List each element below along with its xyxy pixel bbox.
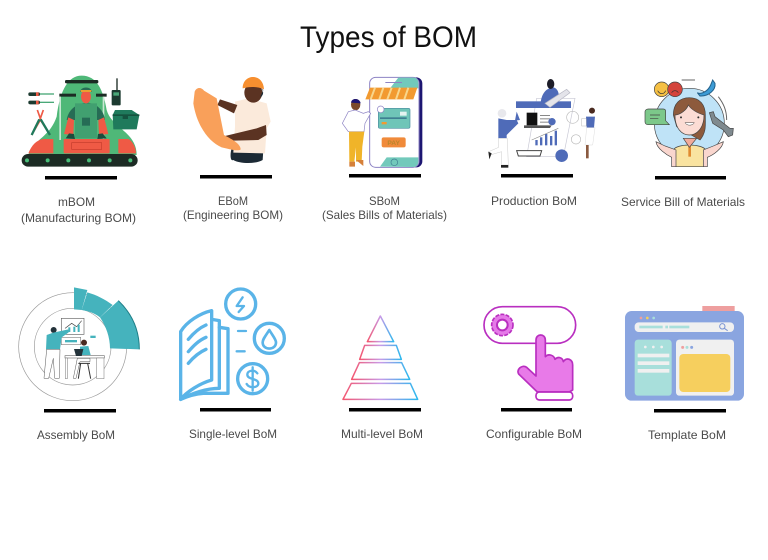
divider bar xyxy=(654,409,726,412)
label subtitle: (Engineering BOM) xyxy=(183,208,283,222)
icon: segmented ring with team xyxy=(19,287,139,401)
icon: engineer with blueprint xyxy=(193,77,271,163)
panel: Service Bill of Materials xyxy=(621,80,745,209)
icon: phone shop: PAY xyxy=(387,140,401,147)
label: Assembly BoM xyxy=(37,428,115,442)
icon: toggle with gear and hand xyxy=(484,307,576,400)
label subtitle: (Manufacturing BOM) xyxy=(21,211,136,225)
divider bar xyxy=(200,175,272,178)
divider bar xyxy=(200,408,271,412)
panel: Single-level BoM xyxy=(181,289,284,441)
icon: book and coins xyxy=(181,289,284,399)
divider bar xyxy=(45,176,117,180)
divider bar xyxy=(655,176,726,180)
label: Single-level BoM xyxy=(189,427,277,441)
icon: conveyor worker xyxy=(22,76,139,167)
label: Service Bill of Materials xyxy=(621,195,745,209)
divider bar xyxy=(349,408,421,412)
divider bar xyxy=(501,408,572,412)
divider bar xyxy=(349,174,421,178)
panel: Template BoM xyxy=(625,306,744,442)
icon: service agent xyxy=(645,80,733,167)
panel: EBoM xyxy=(183,77,283,222)
panel: Configurable BoM xyxy=(484,307,582,441)
label: Production BoM xyxy=(491,194,577,208)
icon: layered pyramid xyxy=(343,316,418,399)
label: SBoM xyxy=(369,194,400,208)
label: Multi-level BoM xyxy=(341,427,423,441)
divider bar xyxy=(501,174,573,178)
label: Configurable BoM xyxy=(486,427,582,441)
label: mBOM xyxy=(58,195,95,209)
label subtitle: (Sales Bills of Materials) xyxy=(322,208,447,222)
panel: Multi-level BoM xyxy=(341,316,423,441)
panel: Production BoM xyxy=(488,79,595,208)
divider bar xyxy=(44,409,116,412)
panel: Assembly BoM xyxy=(19,287,139,442)
panel: mBOM xyxy=(21,76,139,225)
icon: phone shop xyxy=(342,77,422,167)
title: Types of BOM xyxy=(300,21,477,54)
icon: team with charts xyxy=(488,79,595,168)
label: EBoM xyxy=(218,194,248,208)
label: Template BoM xyxy=(648,428,726,442)
panel: SBoM xyxy=(322,77,447,222)
icon: browser window xyxy=(625,306,744,401)
